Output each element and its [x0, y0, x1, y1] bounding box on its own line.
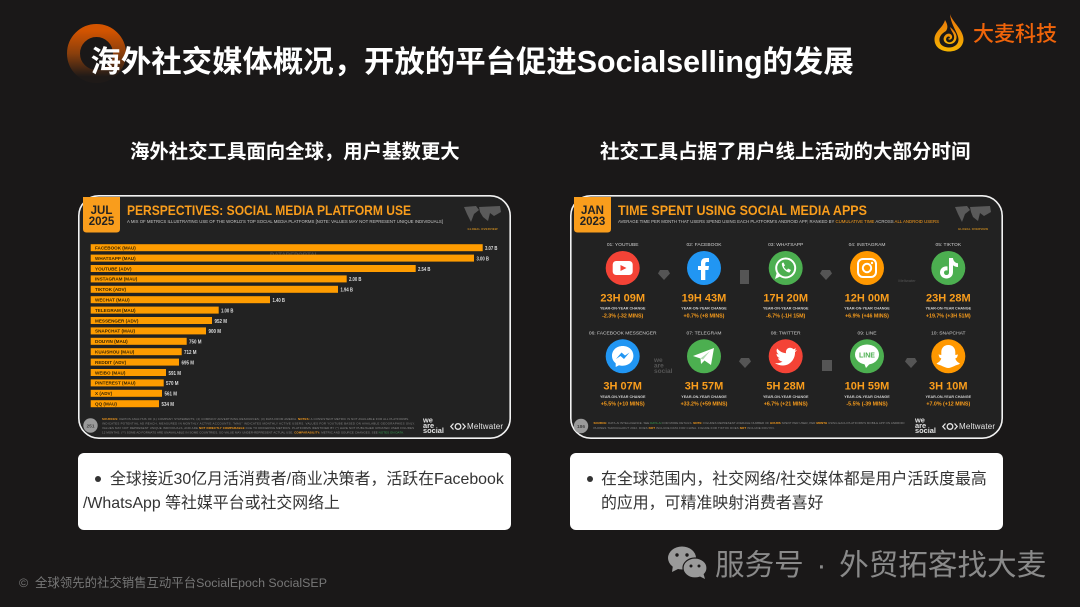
panel subtitle: A MIX OF METRICS ILLUSTRATING USE OF THE WORLD'S TOP SOCIAL MEDIA PLATFORMS [NOTE: VALUES MAY NOT REPRESENT UNIQUE INDIVIDUALS] [127, 219, 443, 224]
bar chart: 3.00 B [476, 256, 489, 262]
page number: 251 [86, 424, 95, 430]
app: telegram: 3H 57M [685, 380, 723, 392]
app: facebook: 19H 43M [682, 292, 726, 304]
bar chart: 750 M [189, 340, 202, 346]
app: snapchat: 10: SNAPCHAT [931, 330, 966, 336]
app: whatsapp: YEAR-ON-YEAR CHANGE [763, 306, 809, 310]
app: youtube: 01: YOUTUBE [607, 242, 639, 248]
logo: we are social: we [914, 416, 925, 424]
card text line 1: 全球接近30亿月活消费者/商业决策者，活跃在Facebook [110, 471, 504, 488]
bar chart: 2.54 B [418, 267, 430, 273]
bar chart: DOUYIN (MAU) [95, 339, 128, 344]
app: instagram: +6.9% (+46 MINS) [845, 314, 889, 320]
bar chart: 1.40 B [272, 298, 285, 304]
page number [83, 418, 98, 433]
panel title: TIME SPENT USING SOCIAL MEDIA APPS [618, 202, 867, 218]
bullet [95, 476, 101, 482]
app: line: 09: LINE [857, 330, 877, 336]
logo: we are social: social [915, 426, 936, 435]
app: facebook messenger: 06: FACEBOOK MESSENGER [589, 330, 657, 336]
bar chart: MESSENGER (ADV) [95, 318, 139, 323]
logo: 大麦科技 [934, 14, 1057, 52]
heading: right: 社交工具占据了用户线上活动的大部分时间 [600, 141, 971, 163]
bar chart: TIKTOK (ADV) [95, 287, 127, 292]
bar chart: 900 M [208, 329, 221, 335]
bar chart: 695 M [182, 360, 194, 366]
footnotes: SOURCE: DATA.AI INTELLIGENCE. SEE DATA.AI FOR MORE DETAILS. NOTE: FIGURES REPRESENT AVERAGE NUMBER OF HOURS SPENT PER USER, PER MONTH USING EACH PLATFORM'S MOBILE APP ON ANDROID [594, 421, 904, 425]
app: instagram [844, 242, 890, 320]
date badge: 2025 [89, 216, 115, 228]
app: facebook messenger: +5.5% (+10 MINS) [601, 402, 645, 408]
bar chart: 952 M [214, 319, 227, 325]
app: facebook messenger [589, 330, 657, 408]
bar chart: 570 M [166, 381, 179, 387]
footnotes [594, 421, 904, 430]
bar chart: WEIBO (MAU) [95, 370, 126, 375]
app: tiktok: YEAR-ON-YEAR CHANGE [926, 306, 972, 310]
logo: we are social: social [423, 426, 444, 435]
footnotes: INDICATES POTENTIAL AD REACH, MEASURED IN MONTHLY ACTIVE ACCOUNTS. "MAU" INDICATES MONTHLY ACTIVE USERS. VALUES FOR YOUTUBE BASED ON AVAILABLE GEOGRAPHIES ONLY. [102, 422, 415, 426]
watermark: wechat account [668, 546, 1046, 582]
page number: 186 [577, 424, 585, 430]
app: youtube: 23H 09M [600, 292, 645, 304]
app: telegram: YEAR-ON-YEAR CHANGE [681, 395, 727, 399]
logo: meltwater: Meltwater [959, 422, 995, 431]
app: telegram [681, 330, 728, 408]
bar chart: 534 M [162, 402, 174, 408]
bar chart: SNAPCHAT (MAU) [95, 329, 135, 334]
footnotes: PHONES THROUGHOUT 2022. DOES NOT INCLUDE DATA FOR CHINA. FIGURE FOR TIKTOK DOES NOT INCLUDE DOUYIN. [594, 426, 775, 430]
app: snapchat [926, 330, 972, 408]
logo: we are social: are [423, 421, 434, 430]
bar chart: REDDIT (ADV) [95, 360, 127, 365]
bar chart [91, 244, 497, 408]
bullet [587, 476, 593, 482]
app: facebook: +0.7% (+8 MINS) [684, 314, 725, 320]
bar chart: 591 M [168, 371, 181, 377]
card text line 2: /WhatsApp 等社媒平台或社交网络上 [83, 495, 340, 512]
partner watermarks: Meltwater [898, 278, 916, 283]
app: facebook: YEAR-ON-YEAR CHANGE [681, 306, 727, 310]
page number [574, 419, 588, 433]
app: whatsapp: 03: WHATSAPP [768, 242, 803, 248]
app: line: -5.5% (-39 MINS) [846, 402, 888, 408]
text card: left [78, 453, 511, 530]
app: snapchat: +7.0% (+12 MINS) [926, 402, 970, 408]
text card: right [570, 453, 1003, 530]
decorative ring [67, 24, 126, 76]
app: twitter: YEAR-ON-YEAR CHANGE [763, 395, 809, 399]
bar chart: 561 M [164, 392, 177, 398]
app: facebook: 02: FACEBOOK [686, 242, 722, 248]
bar chart: FACEBOOK (MAU) [95, 246, 136, 250]
partner watermarks: are [654, 362, 664, 370]
panel: social media platform use [78, 195, 511, 439]
bar chart: 712 M [184, 350, 197, 356]
icon: world map: GLOBAL OVERVIEW [468, 227, 498, 231]
app: whatsapp [763, 242, 809, 320]
app: twitter: 08: TWITTER [771, 330, 801, 336]
app: snapchat: 3H 10M [929, 380, 968, 392]
date badge: JAN [581, 205, 604, 217]
bar chart: X (ADV) [95, 391, 113, 396]
app: line: 10H 59M [845, 380, 889, 392]
icon: world map [464, 206, 501, 231]
date badge [574, 197, 611, 232]
app: twitter: 5H 28M [766, 380, 805, 392]
card text line 2: 的应用，可精准映射消费者喜好 [601, 495, 823, 512]
bar chart: WECHAT (MAU) [95, 298, 130, 302]
app: youtube: YEAR-ON-YEAR CHANGE [600, 306, 646, 310]
app: facebook [681, 242, 727, 320]
panel title: PERSPECTIVES: SOCIAL MEDIA PLATFORM USE [127, 202, 411, 218]
app: twitter [763, 330, 809, 408]
date badge: JUL [91, 205, 112, 217]
icon: world map [955, 206, 991, 231]
app: whatsapp: -6.7% (-1H 15M) [766, 314, 806, 320]
footnotes: VALUES MAY NOT REPRESENT UNIQUE INDIVIDUALS, AND ARE NOT DIRECTLY COMPARABLE DUE TO DIFFERING METRICS. PLATFORMS IDENTIFIED BY (*) HAVE NOT PUBLISHED UPDATED USER FIGURES [102, 426, 414, 430]
panel: time spent using social media apps [570, 195, 1003, 439]
footnotes: SOURCES: KEPIOS ANALYSIS OF (1) COMPANY STATEMENTS; (2) COMPANY ADVERTISING RESOURCES; (3) DATA FROM AMEDIA. NOTES: A CONSISTENT METRIC IS NOT AVAILABLE FOR ALL PLATFORMS. [102, 417, 409, 421]
app: twitter: +6.7% (+21 MINS) [764, 402, 808, 408]
partner watermarks [653, 270, 917, 375]
app: snapchat: YEAR-ON-YEAR CHANGE [926, 395, 972, 399]
card text line 1: 在全球范围内，社交网络/社交媒体都是用户活跃度最高 [601, 471, 987, 488]
bar chart: 3.07 B [485, 246, 498, 252]
app: facebook messenger: 3H 07M [603, 380, 642, 392]
app: whatsapp: 17H 20M [763, 292, 808, 304]
bar chart: 1.00 B [221, 308, 234, 314]
icon: world map: GLOBAL OVERVIEW [958, 227, 988, 231]
partner watermarks: social [654, 368, 673, 375]
heading: left: 海外社交工具面向全球，用户基数更大 [130, 141, 460, 163]
date badge: 2023 [580, 216, 605, 228]
app: tiktok: +19.7% (+3H 51M) [926, 314, 971, 320]
logo: meltwater [943, 422, 995, 431]
app: tiktok: 05: TIKTOK [935, 242, 962, 248]
panel subtitle: AVERAGE TIME PER MONTH THAT USERS SPEND USING EACH PLATFORM'S ANDROID APP, RANKED BY CUMULATIVE TIME ACROSS ALL ANDROID USERS [618, 219, 939, 224]
logo: we are social: are [915, 421, 926, 430]
app: youtube [600, 242, 646, 320]
watermark text: 服务号 · 外贸拓客找大麦 [715, 549, 1046, 582]
logo: meltwater: Meltwater [467, 422, 503, 431]
title: 海外社交媒体概况，开放的平台促进Socialselling的发展 [90, 45, 854, 79]
bar chart: 2.00 B [349, 277, 362, 283]
app: line: YEAR-ON-YEAR CHANGE [844, 395, 890, 399]
app: instagram: 04: INSTAGRAM [849, 242, 885, 248]
app: telegram: +33.2% (+59 MINS) [681, 402, 728, 408]
app: tiktok: 23H 28M [926, 292, 971, 304]
app: line [844, 330, 890, 408]
logo: we are social: we [422, 416, 433, 424]
bar chart: TELEGRAM (MAU) [95, 308, 136, 313]
app: youtube: -2.3% (-32 MINS) [602, 314, 644, 320]
partner watermarks: we [653, 357, 663, 364]
logo: meltwater [451, 422, 503, 431]
bar chart: YOUTUBE (ADV) [95, 266, 132, 271]
app: instagram: 12H 00M [845, 292, 889, 304]
logo: we are social [914, 416, 936, 435]
logo: we are social [422, 416, 444, 435]
app: telegram: 07: TELEGRAM [687, 330, 721, 336]
footnotes [102, 417, 415, 434]
footnotes: 12 MONTHS. (**) SOME AD FORMATS ARE UNAVAILABLE IN SOME COUNTRIES, SO VALUE MAY UNDER-REPRESENT ACTUAL USE. COMPARABILITY: METRIC AND SOURCE CHANGES. SEE NOTES ON DATA. [102, 430, 404, 434]
watermark: datareportal: DATAREPORTAL [270, 253, 319, 259]
app: facebook messenger: YEAR-ON-YEAR CHANGE [600, 395, 646, 399]
bar chart: 1.94 B [340, 288, 353, 294]
copyright footer: © 全球领先的社交销售互动平台SocialEpoch SocialSEP [19, 576, 327, 590]
icon: wechat [668, 546, 706, 579]
date badge [83, 197, 120, 232]
app: instagram: YEAR-ON-YEAR CHANGE [844, 306, 890, 310]
bar chart: KUAISHOU (MAU) [95, 350, 135, 354]
app: line: LINE [859, 352, 875, 360]
logo text: 大麦科技 [973, 23, 1057, 46]
bar chart: QQ (MAU) [95, 402, 117, 406]
bar chart: WHATSAPP (MAU) [95, 256, 136, 261]
bar chart: PINTEREST (MAU) [95, 381, 136, 386]
bar chart: INSTAGRAM (MAU) [95, 277, 138, 282]
icon: flame [934, 14, 964, 52]
app: tiktok [926, 242, 972, 320]
